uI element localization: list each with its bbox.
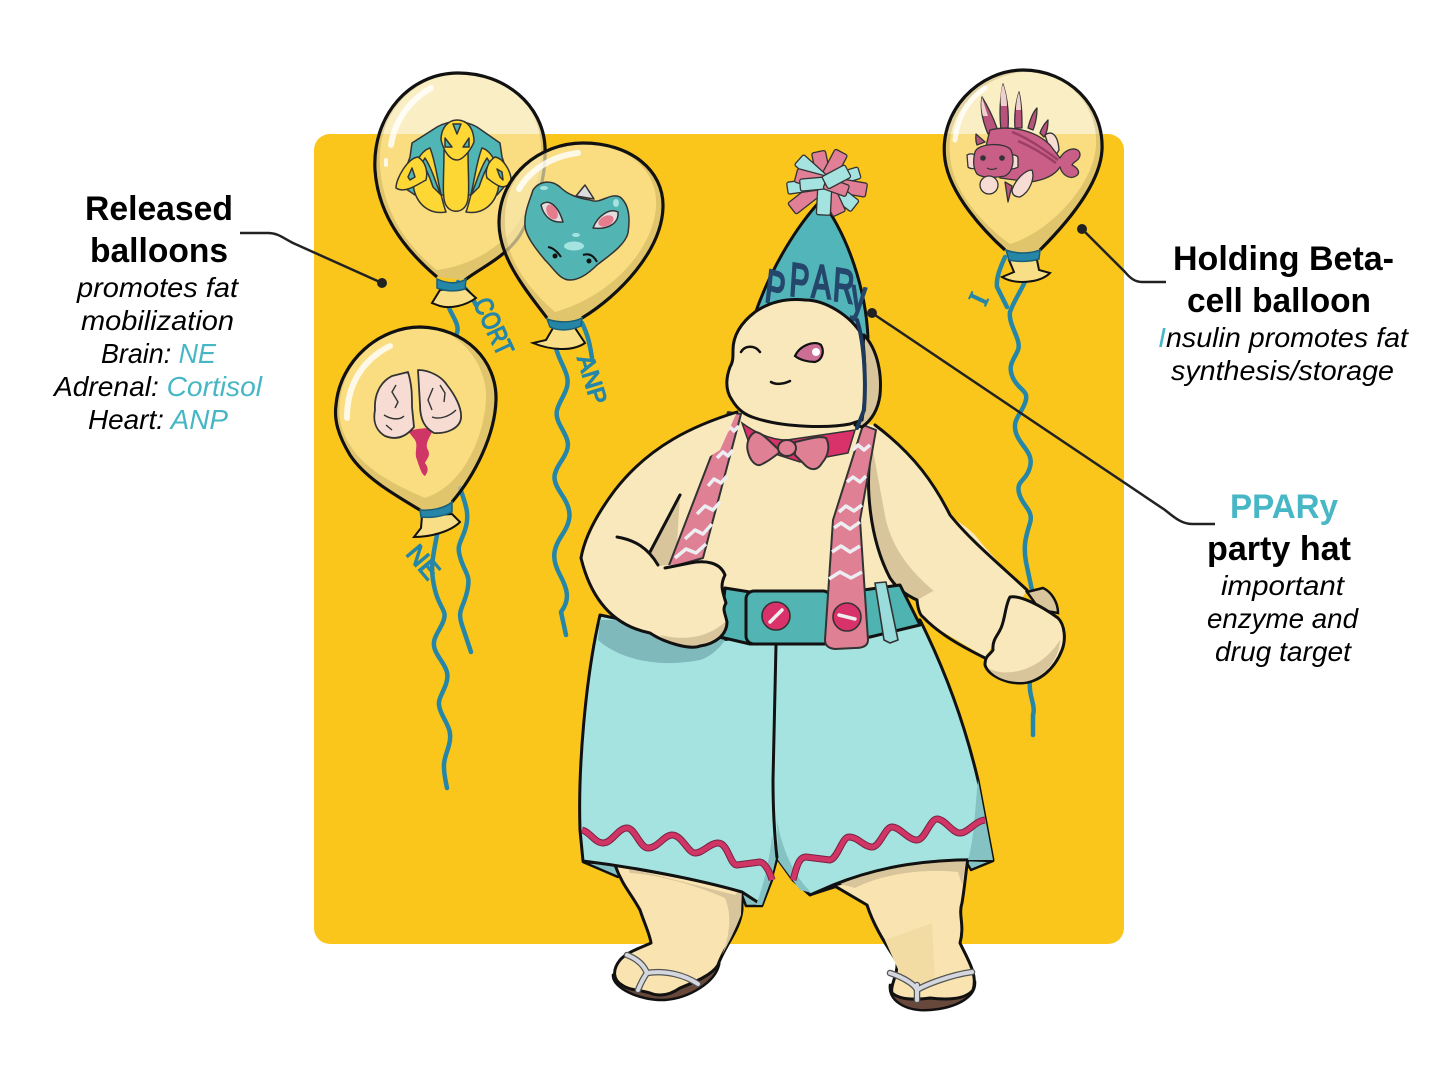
yellow background panel bbox=[314, 134, 1124, 944]
text block: released balloons bbox=[52, 190, 263, 435]
description: synthesis/storage bbox=[1171, 355, 1394, 386]
callout line: released balloons bbox=[240, 233, 387, 288]
right suspender bbox=[825, 425, 876, 649]
heading: party hat bbox=[1207, 530, 1351, 568]
icon: brain bbox=[374, 370, 461, 476]
balloon knot bbox=[1002, 250, 1050, 282]
heading bbox=[1173, 240, 1394, 320]
left sandal sole bbox=[613, 965, 719, 1000]
string label: ANP: ANP bbox=[571, 352, 612, 408]
description: Adrenal: Cortisol bbox=[52, 371, 263, 402]
hat strap bbox=[857, 320, 865, 428]
shorts bbox=[580, 615, 993, 905]
callout line: PPARy hat bbox=[867, 308, 1215, 524]
party hat bbox=[755, 200, 868, 340]
description: promotes fat bbox=[76, 272, 239, 303]
heading bbox=[85, 190, 233, 270]
string label: CORT: CORT bbox=[468, 293, 520, 360]
text block: PPARy party hat bbox=[1207, 488, 1359, 667]
left suspender bbox=[668, 412, 741, 568]
icon: lionfish bbox=[967, 84, 1080, 202]
left arm and fist bbox=[581, 412, 737, 647]
balloon: ANP lizard bbox=[497, 141, 665, 350]
back of head bbox=[855, 335, 880, 427]
face bbox=[741, 343, 823, 384]
back flaps of shorts bbox=[583, 860, 993, 906]
left leg bbox=[613, 865, 742, 1000]
right mitt bbox=[985, 588, 1064, 683]
armpit shading bbox=[650, 445, 935, 600]
description: Insulin promotes fat bbox=[1158, 322, 1409, 353]
description: Brain: NE bbox=[101, 338, 216, 369]
balloon: insulin lionfish bbox=[942, 68, 1104, 283]
left sandal strap bbox=[627, 955, 698, 990]
head bbox=[727, 300, 865, 426]
balloon knot bbox=[432, 279, 476, 307]
callout line: holding beta-cell balloon bbox=[1077, 224, 1166, 282]
description: enzyme and bbox=[1207, 603, 1359, 634]
icon: lizard head bbox=[525, 182, 629, 280]
description bbox=[1207, 570, 1359, 667]
right leg bbox=[833, 858, 975, 1010]
hat label: PPARy bbox=[763, 254, 868, 324]
pom-pom bbox=[787, 149, 868, 217]
balloon knot bbox=[414, 502, 460, 537]
balloon: cortisol bbox=[373, 71, 547, 308]
string label: I: I bbox=[963, 288, 995, 310]
bow tie bbox=[747, 432, 828, 469]
heading: PPARy bbox=[1230, 488, 1338, 526]
torso bbox=[615, 412, 1027, 600]
balloon knot bbox=[533, 318, 585, 349]
description: mobilization bbox=[81, 305, 234, 336]
description bbox=[1158, 322, 1409, 386]
heading: cell balloon bbox=[1187, 282, 1371, 320]
heading bbox=[1207, 488, 1351, 568]
right sandal strap bbox=[890, 972, 972, 1000]
buttons bbox=[762, 602, 861, 631]
heading: balloons bbox=[90, 232, 228, 270]
heading: Holding Beta- bbox=[1173, 240, 1394, 278]
right sandal sole bbox=[890, 982, 975, 1010]
belt bbox=[720, 582, 920, 644]
hem zigzag bbox=[582, 819, 985, 880]
strings of released balloons bbox=[432, 282, 592, 788]
heading: Released bbox=[85, 190, 233, 228]
string label: NE: NE bbox=[400, 539, 447, 585]
belt loop bbox=[875, 582, 898, 643]
right arm bbox=[905, 515, 1027, 658]
collar bbox=[742, 423, 855, 462]
balloon: NE brain bbox=[334, 325, 498, 538]
description: drug target bbox=[1215, 636, 1352, 667]
icon: cobra bbox=[396, 120, 511, 213]
character: party bear bbox=[580, 149, 1064, 1010]
strings of held balloon bbox=[997, 257, 1034, 735]
description: Heart: ANP bbox=[88, 404, 228, 435]
text block: holding beta-cell balloon bbox=[1158, 240, 1409, 386]
description bbox=[52, 272, 263, 435]
description: important bbox=[1221, 570, 1345, 601]
